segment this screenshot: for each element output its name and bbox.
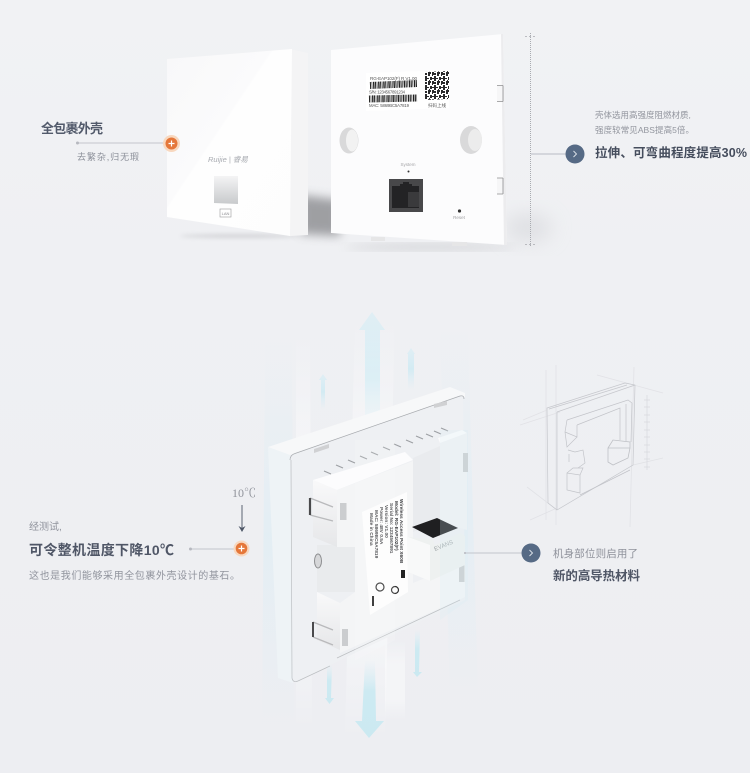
callout: fully wrapped shell: 去繁杂,归无瑕 [77, 151, 139, 162]
callout: strength: 壳体选用高强度阻燃材质, [595, 110, 691, 120]
back view device [331, 34, 507, 246]
airflow light overlays [355, 430, 468, 660]
reset button [453, 209, 466, 220]
device shadows [180, 195, 552, 250]
system LED [400, 162, 416, 172]
compliance sticker: Version: V1.00 [383, 505, 389, 538]
callout: 10 degree reduction [29, 486, 256, 582]
brand logo: Ruijie | 睿易 [208, 155, 248, 164]
compliance sticker [362, 492, 408, 615]
callout: thermal material: 新的高导热材料 [553, 568, 640, 583]
plate outline [547, 383, 635, 510]
module outline [565, 400, 632, 495]
blue chevron marker [522, 544, 540, 562]
compliance sticker: Made in China [368, 513, 374, 546]
orange plus marker [234, 540, 250, 556]
callout: 10 degree reduction: 这也是我们能够采用全包裹外壳设计的基石。 [29, 569, 240, 582]
top vent slots [324, 428, 448, 474]
callout: strength [531, 110, 747, 164]
upper module block [313, 452, 413, 547]
bottom tabs [371, 237, 467, 246]
system LED: System [400, 162, 416, 167]
construction lines [520, 365, 663, 527]
callout: fully wrapped shell [41, 121, 180, 162]
reset button: Reset [453, 215, 466, 220]
blue chevron marker [566, 144, 584, 164]
ethernet jack: EVANS [434, 540, 454, 553]
QR code [425, 71, 449, 100]
airflow bands behind device [262, 315, 478, 740]
orange plus marker [163, 135, 180, 152]
product label: RG-EAP102(F) R V1.00 [370, 76, 417, 81]
callout: thermal material [464, 544, 640, 583]
product label: MAC: 5869BC5A7819 [369, 103, 410, 108]
screw hole [314, 554, 322, 568]
compliance sticker: Serial No: 1234567891 [388, 503, 394, 554]
callout: 10 degree reduction: 可令整机温度下降10℃ [29, 542, 174, 558]
callout: fully wrapped shell: 全包裹外壳 [41, 121, 103, 136]
recess between modules [317, 545, 355, 592]
callout: 10 degree reduction: 10℃ [232, 486, 256, 500]
compliance sticker: Wireless Access Point X60B [398, 499, 404, 564]
ethernet jack [408, 518, 465, 581]
front view device [167, 49, 308, 236]
LAN mark [220, 209, 231, 217]
airflow arrows up [319, 312, 415, 445]
right recess and tower [413, 430, 467, 532]
callout: 10 degree reduction: 经测试, [29, 520, 62, 533]
arrow to marker [238, 505, 246, 532]
LAN mark: LAN [222, 211, 230, 216]
callout: strength: 拉伸、可弯曲程度提高30% [595, 145, 747, 160]
LED window [214, 176, 238, 204]
airflow arrows down [325, 630, 422, 738]
compliance sticker: Model: RG-EAP102(F) [393, 501, 399, 551]
product label: 扫码上线 [428, 102, 446, 109]
side clips [497, 86, 503, 194]
clip slots [310, 453, 468, 646]
wall plate [268, 387, 468, 683]
plate clips [314, 401, 447, 453]
mounting holes [340, 126, 482, 154]
callout: strength: 强度较常见ABS提高5倍。 [595, 125, 694, 135]
callout: thermal material: 机身部位则启用了 [553, 547, 638, 560]
RJ45 port [389, 179, 423, 212]
ruler ticks [644, 395, 650, 470]
product label: S/N: 1234567891234 [369, 90, 406, 94]
jack outline [608, 440, 630, 465]
lower module block [317, 461, 465, 653]
compliance sticker: Power: 48V 0.5A [378, 507, 384, 545]
compliance sticker: MAC: 5869BC5A7819 [373, 510, 379, 559]
product label [366, 70, 449, 111]
dotted dimension line [525, 33, 536, 247]
wireframe sketch [520, 365, 663, 527]
